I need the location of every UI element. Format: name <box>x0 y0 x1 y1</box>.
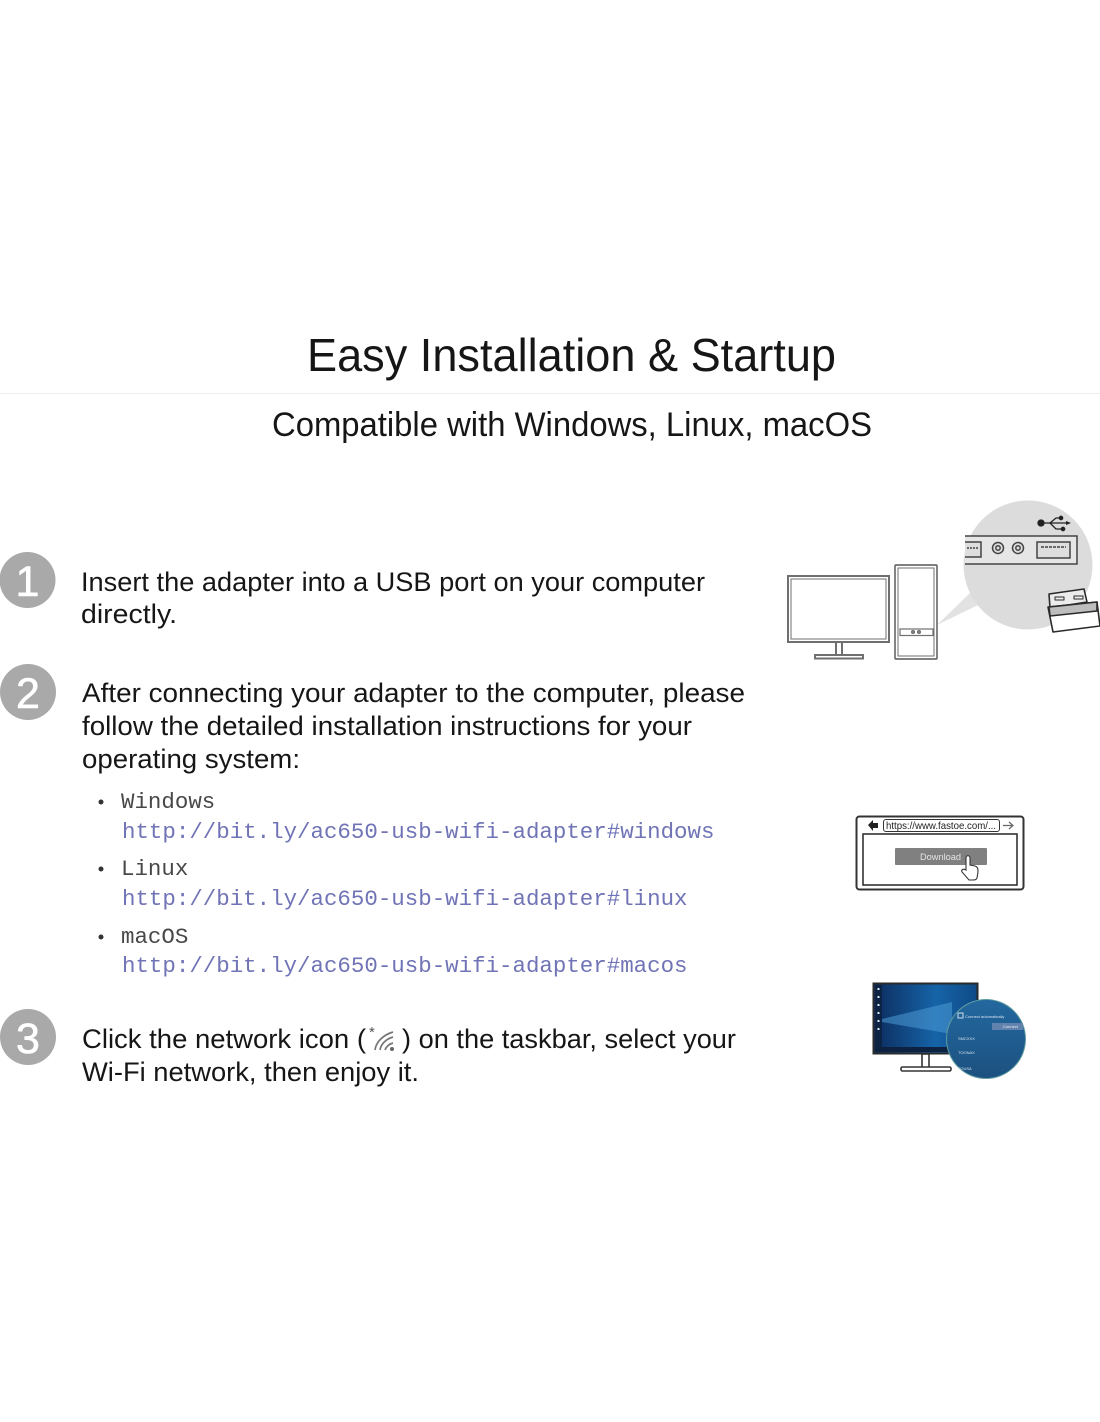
list: macOS <box>98 924 688 979</box>
step 1 badge <box>0 552 56 608</box>
step 2 badge <box>0 664 56 720</box>
hand cursor <box>962 856 978 880</box>
monitor frame <box>874 984 978 1054</box>
zoom connector <box>937 593 978 625</box>
list: macOS: macOS <box>121 924 188 950</box>
list: Windows: http://bit.ly/ac650-usb-wifi-adapter#windows <box>122 819 714 845</box>
window light <box>882 1002 952 1034</box>
icon: monitor with Wi-Fi panel <box>874 984 1026 1078</box>
step 1 text <box>81 567 705 629</box>
subtitle: Compatible with Windows, Linux, macOS <box>272 406 872 444</box>
icon: computer and USB adapter <box>788 500 1100 659</box>
monitor stand <box>901 1054 951 1071</box>
USB symbol <box>1038 516 1071 531</box>
download button <box>895 848 987 865</box>
step 3 text <box>82 1024 736 1087</box>
icon: monitor with Wi-Fi panel: TOONAX <box>958 1050 975 1055</box>
step 3 badge <box>0 1009 56 1065</box>
step 2 text <box>82 678 745 774</box>
step 1 text: Insert the adapter into a USB port on your computer <box>81 567 705 597</box>
USB adapter <box>1048 589 1100 632</box>
taskbar <box>875 1047 976 1052</box>
list: Linux: Linux <box>121 856 188 882</box>
icon: network wifi <box>369 1024 394 1051</box>
step 2 text: After connecting your adapter to the computer, please <box>82 678 745 708</box>
step 2 badge: 2 <box>16 670 40 718</box>
step 3 text: Wi-Fi network, then enjoy it. <box>82 1057 419 1087</box>
forward arrow <box>1003 822 1013 829</box>
list: Windows <box>98 789 714 845</box>
magnified circle <box>964 500 1092 630</box>
icon: network wifi: * <box>369 1024 375 1041</box>
sidebar <box>875 985 882 1052</box>
icon: monitor with Wi-Fi panel: TOUSA <box>958 1066 972 1071</box>
download button: Download <box>920 852 961 863</box>
icon: browser download <box>856 816 1024 890</box>
icon: monitor with Wi-Fi panel: SMCXXX <box>958 1036 975 1041</box>
list: Linux: http://bit.ly/ac650-usb-wifi-adapter#linux <box>122 886 688 912</box>
Wi-Fi panel circle <box>946 1000 1026 1078</box>
step 1 badge: 1 <box>16 558 39 606</box>
step 1 text: directly. <box>81 599 177 629</box>
step 2 text: operating system: <box>82 744 300 774</box>
USB panel <box>965 536 1077 564</box>
title: Easy Installation & Startup <box>307 329 836 381</box>
icon: monitor with Wi-Fi panel: Connect <box>1003 1024 1019 1029</box>
step 3 text: ) on the taskbar, select your <box>402 1024 736 1054</box>
list: Linux <box>98 856 688 912</box>
address bar: https://www.fastoe.com/... <box>886 820 996 832</box>
computer tower <box>895 565 937 659</box>
monitor <box>788 576 889 658</box>
list: Windows: Windows <box>121 789 215 815</box>
step 3 badge: 3 <box>16 1015 40 1063</box>
step 2 text: follow the detailed installation instructions for your <box>82 711 692 741</box>
step 3 text: Click the network icon ( <box>82 1024 366 1054</box>
icon: monitor with Wi-Fi panel: Connect automatically <box>965 1014 1004 1019</box>
back arrow <box>868 820 878 831</box>
list: macOS: http://bit.ly/ac650-usb-wifi-adapter#macos <box>122 953 688 979</box>
